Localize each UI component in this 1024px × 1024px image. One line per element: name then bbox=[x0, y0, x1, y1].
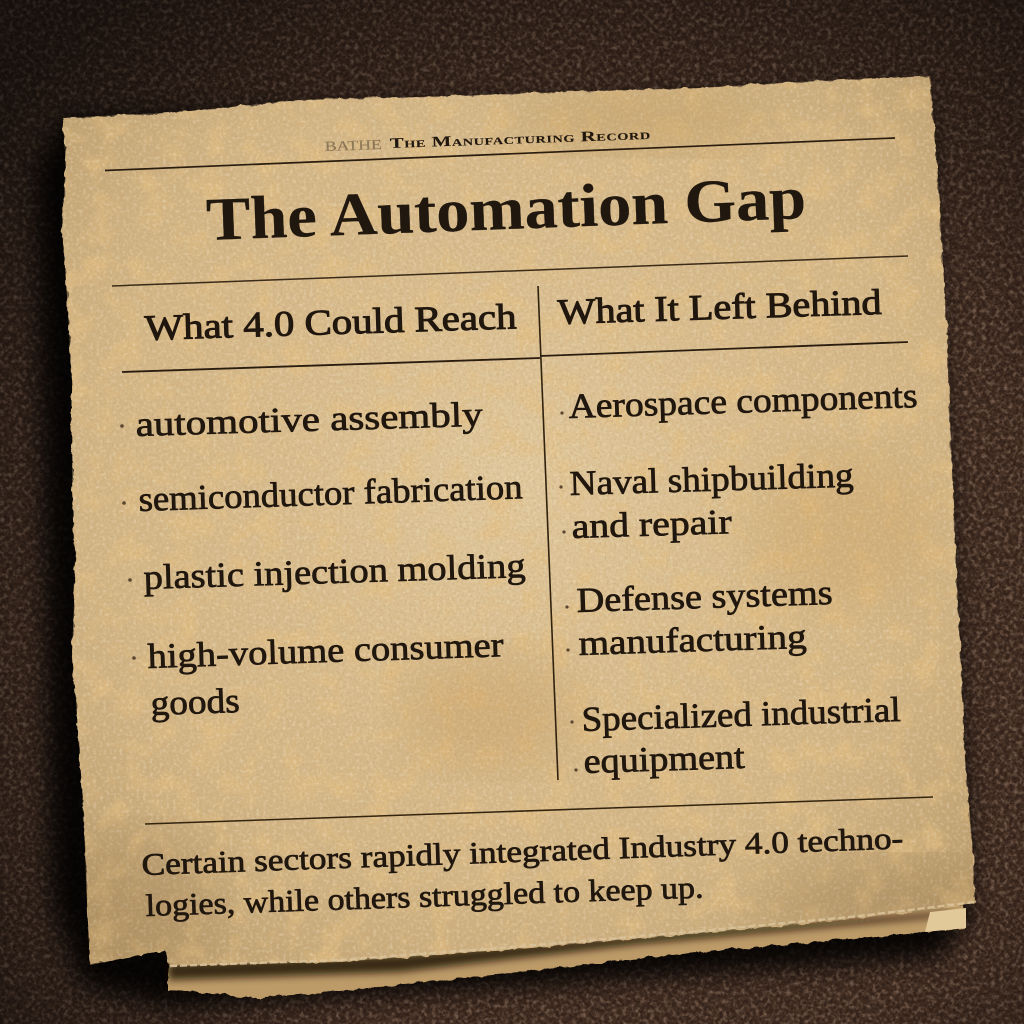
footer caption bbox=[141, 820, 904, 923]
column header rule left bbox=[122, 358, 540, 372]
list: right column items: Specialized industrial bbox=[581, 690, 901, 739]
list: right column items: Naval shipbuilding bbox=[569, 456, 854, 503]
masthead rule bbox=[105, 138, 895, 170]
footer caption: logies, while others struggled to keep up. bbox=[145, 870, 704, 923]
list: left column items: semiconductor fabrication bbox=[138, 467, 523, 519]
list: left column items bbox=[120, 395, 526, 723]
publication name: The Manufacturing Record bbox=[390, 127, 651, 152]
footer caption: Certain sectors rapidly integrated Industry 4.0 techno- bbox=[141, 820, 904, 882]
footer rule bbox=[145, 797, 933, 824]
column divider bbox=[538, 286, 558, 780]
list: right column items: Aerospace components bbox=[568, 376, 918, 426]
list: left column items: goods bbox=[150, 681, 240, 723]
list: right column items: and repair bbox=[571, 502, 733, 546]
column header rule right bbox=[540, 342, 908, 356]
right column heading: What It Left Behind bbox=[557, 282, 882, 332]
title: The Automation Gap bbox=[205, 165, 807, 254]
panel: what it left behind bbox=[557, 282, 918, 781]
list: left column items: high-volume consumer bbox=[147, 625, 504, 676]
list: right column items: equipment bbox=[583, 737, 745, 781]
list: right column items: Defense systems bbox=[576, 573, 833, 620]
faded masthead ghost print: BATHE bbox=[325, 138, 382, 155]
second sheet beneath the clipping bbox=[168, 905, 966, 998]
title rule bbox=[112, 256, 908, 286]
list: left column items: automotive assembly bbox=[135, 395, 484, 444]
list: right column items bbox=[559, 376, 918, 781]
list: right column items: manufacturing bbox=[578, 617, 807, 663]
masthead bbox=[325, 127, 651, 155]
panel: what 4.0 could reach bbox=[120, 296, 526, 723]
list: left column items: plastic injection molding bbox=[143, 546, 526, 597]
left column heading: What 4.0 Could Reach bbox=[144, 296, 517, 348]
